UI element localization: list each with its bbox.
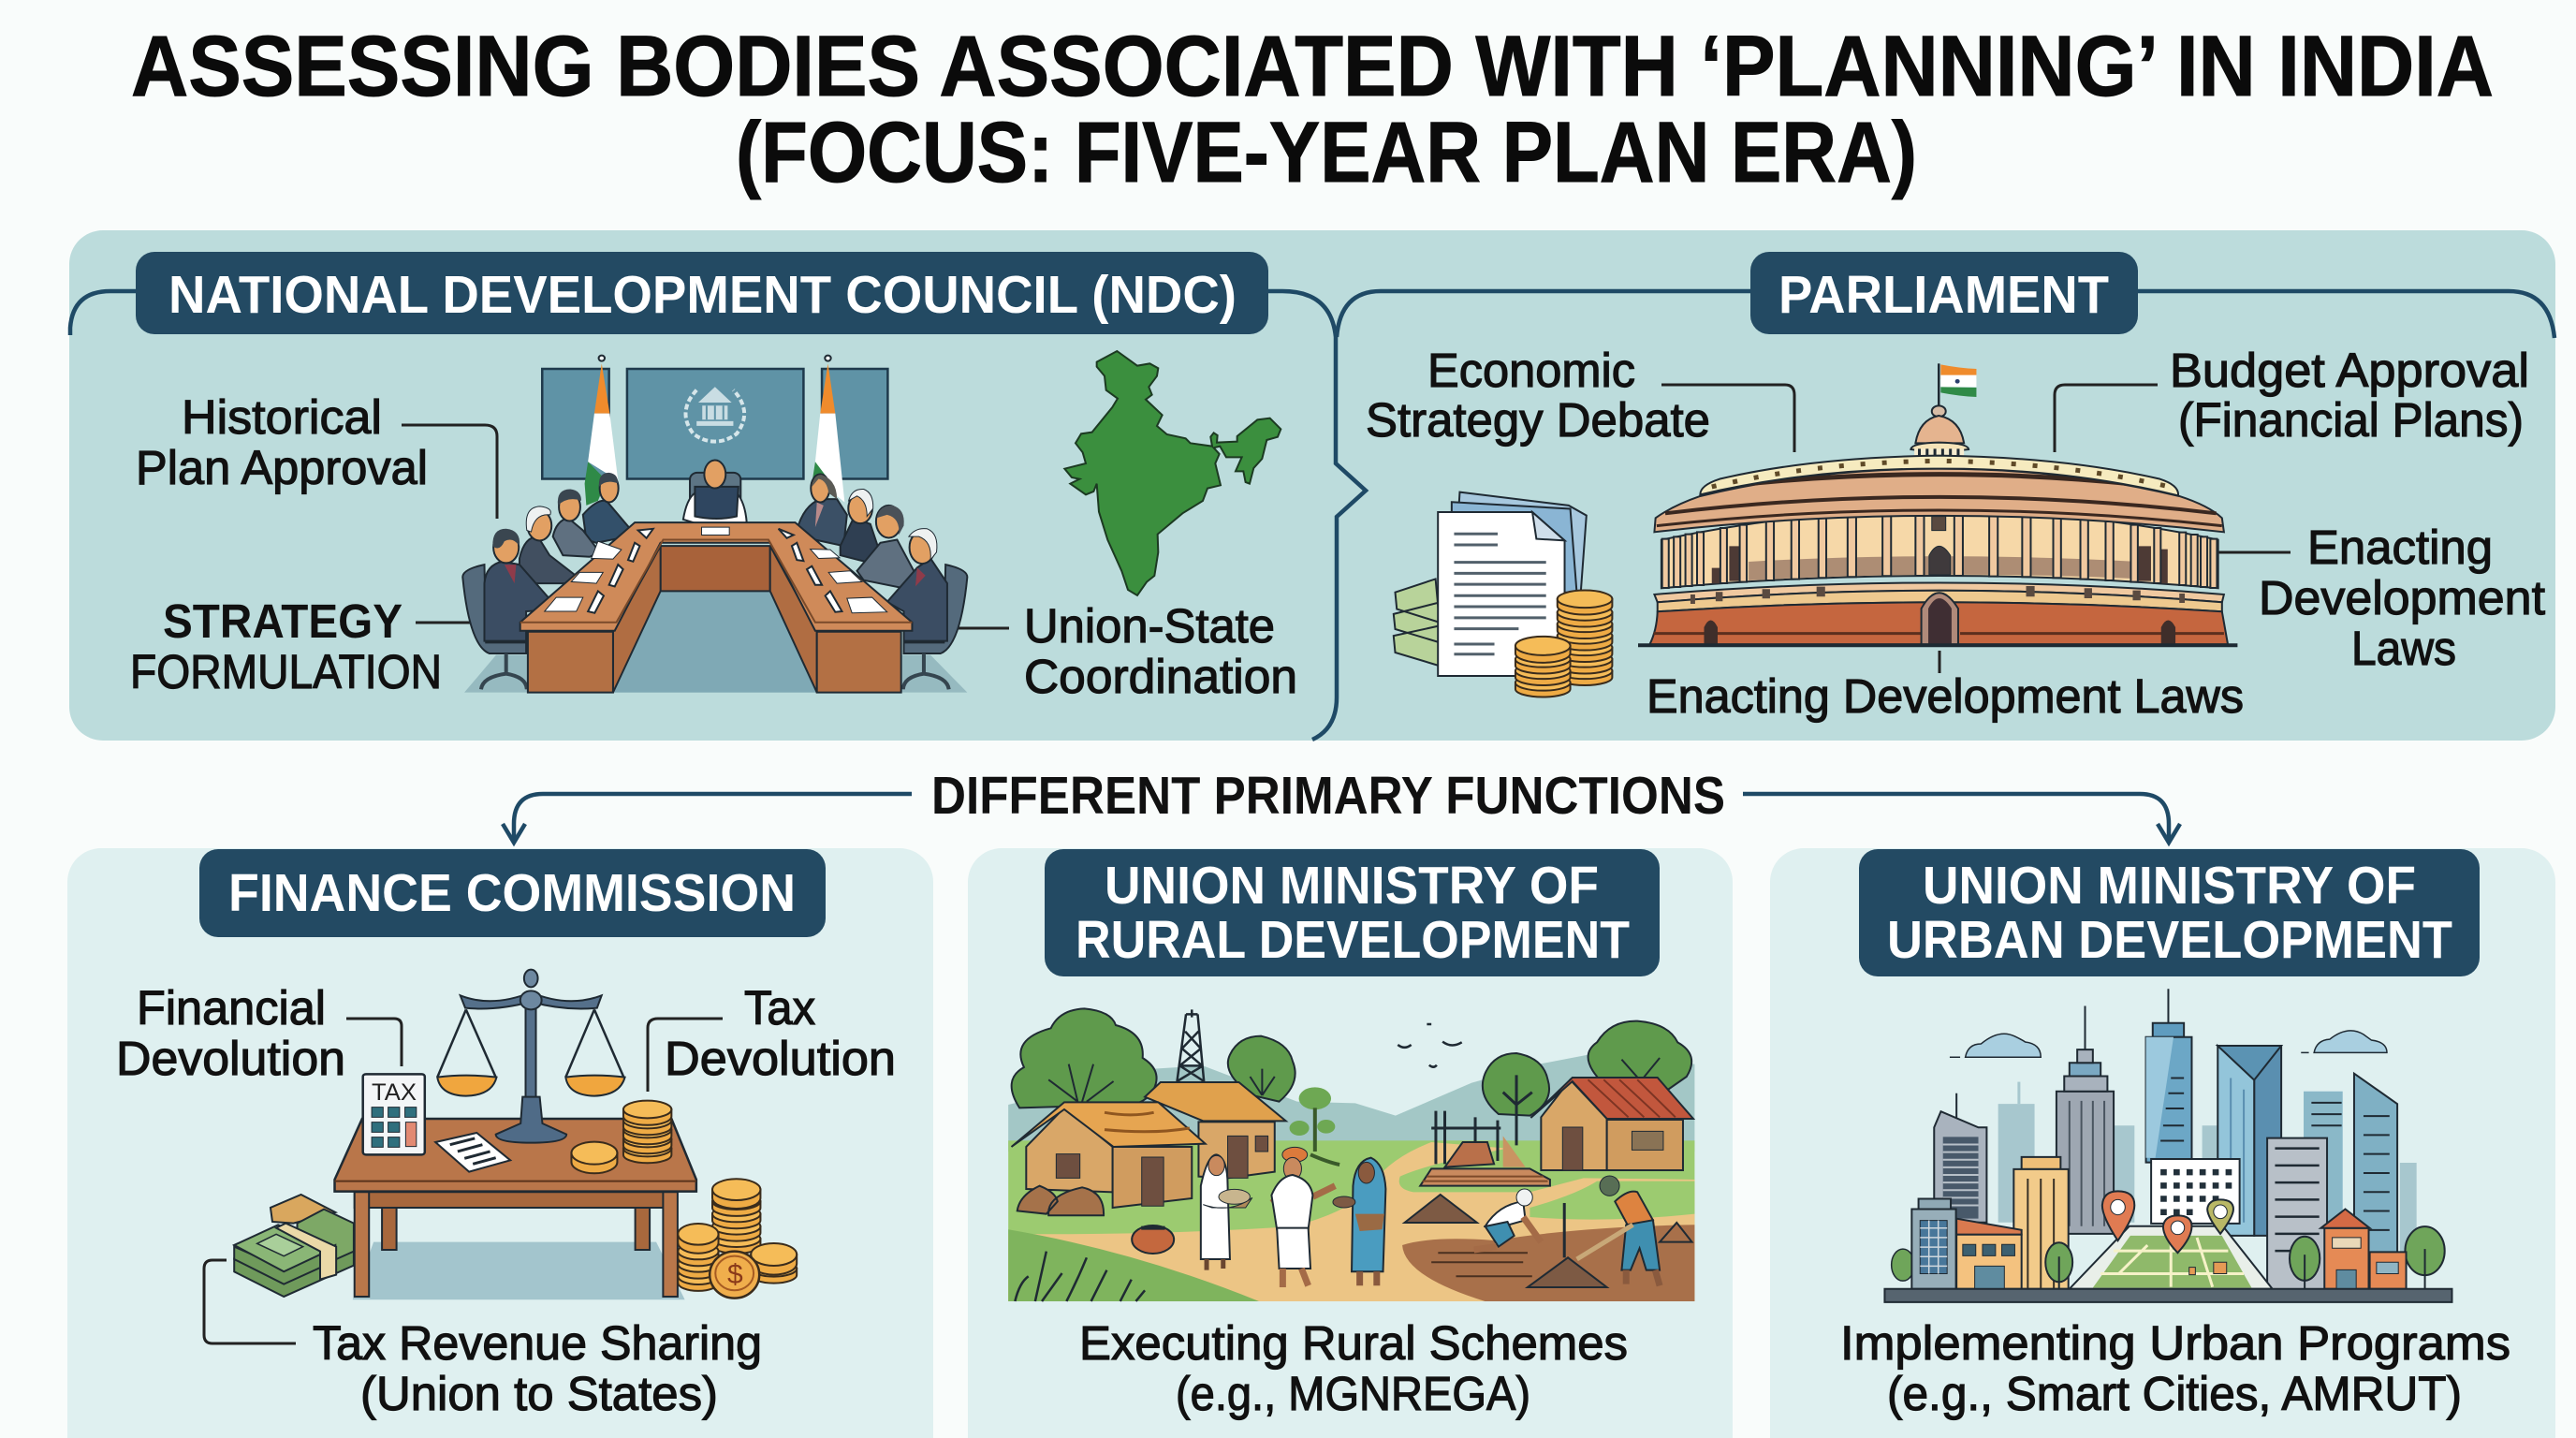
trees	[1012, 1008, 1691, 1165]
icon text: dollar sign on coin: $	[727, 1259, 743, 1290]
heading: Parliament: PARLIAMENT	[1778, 265, 2109, 325]
label: Tax Devolution	[648, 981, 896, 1092]
panel: Union Ministry of Rural Development	[968, 848, 1733, 1438]
label: Financial Devolution: Devolution	[116, 1032, 345, 1085]
icon text: TAX on calculator: TAX	[372, 1079, 417, 1106]
houses	[1012, 1078, 1693, 1215]
panel: Union Ministry of Urban Development	[1770, 848, 2555, 1438]
heading: Rural Development: RURAL DEVELOPMENT	[1076, 910, 1630, 970]
title	[131, 19, 2494, 200]
label: Strategy Formulation: STRATEGY	[163, 594, 402, 648]
heading with arrows: Different Primary Functions: DIFFERENT PRIMARY FUNCTIONS	[931, 766, 1725, 826]
villagers	[1201, 1147, 1660, 1287]
heading: Urban Development	[1859, 849, 2480, 976]
illustration: table with scales, calculator, cash and coins	[234, 970, 797, 1299]
label: Economic Strategy Debate: Strategy Debate	[1366, 393, 1710, 447]
label: Union-State Coordination: Coordination	[1024, 650, 1297, 703]
label: Strategy Formulation: FORMULATION	[130, 645, 442, 698]
label: Historical Plan Approval	[136, 390, 497, 519]
table and floor	[520, 522, 912, 693]
label: Budget Approval: (Financial Plans)	[2178, 393, 2524, 447]
label: Enacting Development Laws (right): Laws	[2351, 622, 2456, 675]
label: Financial Devolution: Financial	[137, 981, 326, 1034]
label: Tax Revenue Sharing: (Union to States)	[360, 1367, 718, 1420]
caption: Implementing Urban Programs: Implementing Urban Programs	[1840, 1316, 2510, 1370]
heading: Urban Development: UNION MINISTRY OF	[1923, 856, 2416, 916]
icon: map of India	[1064, 351, 1281, 595]
panel: top band background	[69, 230, 2555, 741]
label: Enacting Development Laws (right)	[2218, 521, 2545, 675]
panel: National Development Council	[130, 252, 1297, 703]
label: Budget Approval: Budget Approval	[2170, 344, 2529, 397]
caption: Executing Rural Schemes	[1079, 1316, 1628, 1420]
illustration: village scene	[1008, 1008, 1694, 1301]
label: Tax Revenue Sharing	[204, 1260, 762, 1420]
panel divider: chevron outline between NDC and Parliament	[70, 291, 2554, 740]
caption: Executing Rural Schemes: Executing Rural Schemes	[1079, 1316, 1628, 1370]
panel: Parliament	[1366, 252, 2545, 723]
illustration: smart city skyline	[1884, 989, 2452, 1302]
figures: seated chair and members	[462, 461, 967, 689]
heading: NDC: NATIONAL DEVELOPMENT COUNCIL (NDC)	[168, 265, 1237, 325]
label: Financial Devolution	[116, 981, 402, 1085]
caption: Executing Rural Schemes: (e.g., MGNREGA)	[1176, 1367, 1530, 1420]
label: Economic Strategy Debate: Economic	[1427, 344, 1635, 397]
label: Budget Approval	[2055, 344, 2529, 452]
panel: Finance Commission	[67, 848, 933, 1438]
label: Historical Plan Approval: Plan Approval	[136, 441, 428, 494]
illustration: Parliament building	[1638, 363, 2237, 645]
heading: Urban Development: URBAN DEVELOPMENT	[1887, 910, 2452, 970]
label: Strategy Formulation	[130, 594, 470, 698]
label: Tax Devolution: Tax	[744, 981, 815, 1034]
title: (FOCUS: FIVE-YEAR PLAN ERA)	[736, 105, 1917, 200]
label: Enacting Development Laws (right): Development	[2259, 571, 2545, 624]
caption: Implementing Urban Programs	[1840, 1316, 2510, 1420]
label: Economic Strategy Debate	[1366, 344, 1794, 452]
heading: Rural Development: UNION MINISTRY OF	[1105, 856, 1599, 916]
label: Enacting Development Laws (right): Enacting	[2307, 521, 2493, 574]
label: Union-State Coordination	[959, 599, 1297, 703]
heading: Finance Commission: FINANCE COMMISSION	[228, 863, 796, 923]
heading: Parliament	[1750, 252, 2138, 334]
illustration: council meeting table	[462, 356, 967, 693]
construction site	[1420, 1111, 1550, 1186]
label: Enacting Development Laws (bottom): Enacting Development Laws	[1647, 669, 2244, 723]
heading: NDC	[136, 252, 1268, 334]
icon: documents, cash and coins	[1394, 492, 1612, 697]
caption: Implementing Urban Programs: (e.g., Smart Cities, AMRUT)	[1887, 1367, 2462, 1420]
label: Tax Revenue Sharing: Tax Revenue Sharing	[313, 1316, 762, 1370]
label: Historical Plan Approval: Historical	[182, 390, 382, 444]
label: Union-State Coordination: Union-State	[1024, 599, 1275, 653]
heading: Rural Development	[1045, 849, 1660, 976]
label: Tax Devolution: Devolution	[665, 1032, 896, 1085]
heading with arrows: Different Primary Functions	[503, 766, 2180, 843]
heading: Finance Commission	[199, 849, 826, 937]
